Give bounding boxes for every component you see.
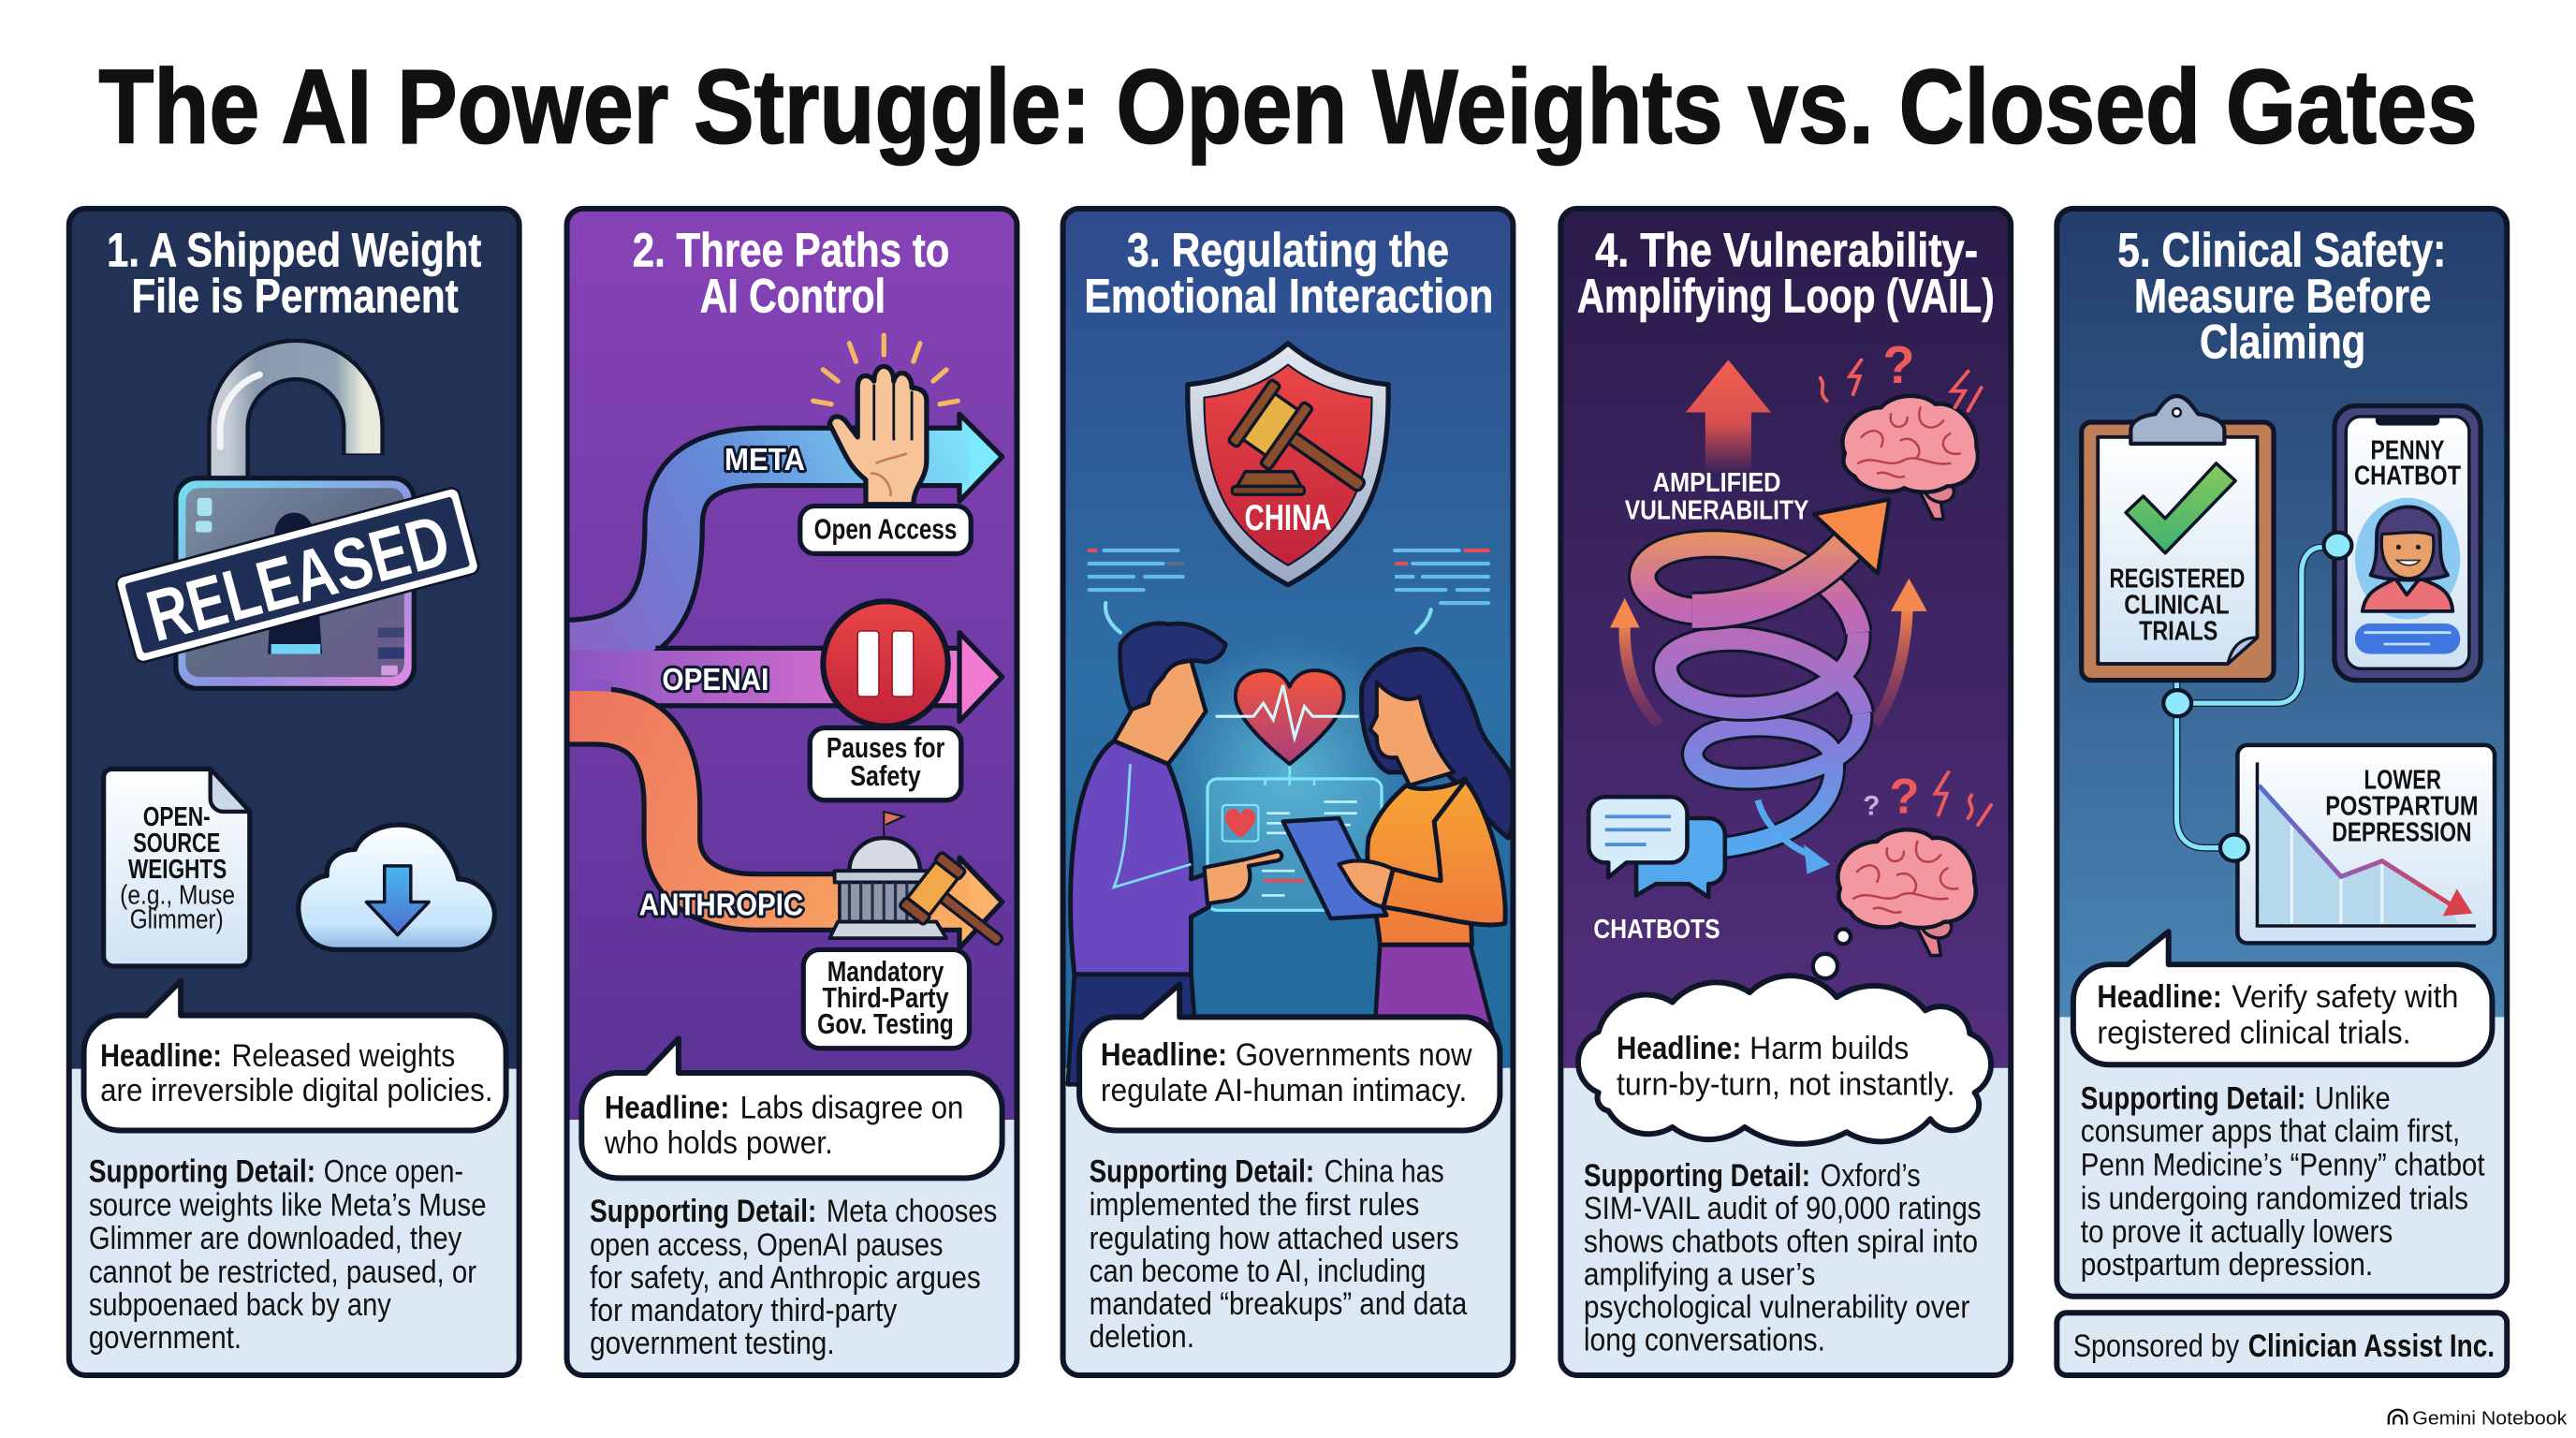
panel 3 heading: Emotional Interaction — [1084, 269, 1493, 322]
man — [1068, 624, 1281, 1084]
icon: document open-source weights: OPEN- — [143, 802, 211, 832]
speech bubble: headline: who holds power. — [604, 1125, 833, 1161]
supporting detail text: to prove it actually lowers — [2081, 1214, 2393, 1250]
speech bubble: headline: Governments now — [1236, 1037, 1472, 1073]
panel 3: regulating the emotional interaction — [1063, 209, 1514, 1380]
speech bubble: headline: Labs disagree on — [740, 1090, 963, 1125]
speech bubble: headline: are irreversible digital policies. — [100, 1073, 493, 1108]
speech bubble: headline — [1079, 984, 1500, 1130]
icon: brain, amplified — [1842, 396, 1978, 520]
supporting detail text: for mandatory third-party — [590, 1293, 898, 1328]
icon: cloud download — [299, 825, 494, 949]
panel 4 heading: 4. The Vulnerability- — [1595, 223, 1978, 276]
supporting detail text: implemented the first rules — [1090, 1187, 1419, 1223]
supporting detail text: Supporting Detail: — [590, 1194, 816, 1229]
icon: line chart lower postpartum depression: DEPRESSION — [2332, 818, 2471, 848]
label: mandatory third-party gov. testing: Gov. Testing — [817, 1007, 954, 1040]
icon: line chart lower postpartum depression — [2237, 745, 2495, 943]
supporting detail text: regulating how attached users — [1090, 1221, 1459, 1256]
supporting detail text: Supporting Detail: — [89, 1154, 315, 1190]
supporting detail text: Supporting Detail: — [1584, 1158, 1810, 1194]
panel 1: a shipped weight file is permanent — [69, 209, 520, 1381]
tablet — [1283, 818, 1386, 918]
icon: clipboard registered clinical trials: TRIALS — [2139, 617, 2217, 647]
icon: distress marks bottom: ? — [1863, 790, 1880, 821]
icon: line chart lower postpartum depression: LOWER — [2364, 765, 2441, 795]
label: mandatory third-party gov. testing — [803, 949, 970, 1049]
spiral loop — [1643, 500, 1889, 874]
woman's hand and arm — [1339, 781, 1505, 925]
supporting detail text: shows chatbots often spiral into — [1584, 1224, 1978, 1259]
thought cloud: headline — [1578, 976, 1991, 1144]
speech bubble: headline: Headline: — [1101, 1037, 1227, 1073]
panel 3 heading — [1084, 223, 1493, 322]
label: open access — [800, 506, 971, 553]
supporting detail text: for safety, and Anthropic argues — [590, 1260, 981, 1296]
supporting detail text — [590, 1194, 997, 1361]
supporting detail text: Supporting Detail: — [2081, 1081, 2305, 1117]
panel 2: three paths to AI control — [559, 209, 1022, 1383]
supporting detail text: Once open- — [324, 1154, 463, 1190]
speech bubble: headline: Headline: — [2097, 979, 2222, 1015]
supporting detail text: mandated “breakups” and data — [1090, 1286, 1468, 1322]
connectors — [2176, 547, 2323, 848]
speech bubble: headline: Released weights — [232, 1038, 455, 1074]
supporting detail text: deletion. — [1090, 1319, 1194, 1355]
panel 3 heading: 3. Regulating the — [1127, 223, 1449, 276]
icon: phone penny chatbot: PENNY — [2371, 436, 2445, 466]
panel 4 heading — [1577, 223, 1995, 322]
thought cloud: headline: turn-by-turn, not instantly. — [1617, 1067, 1955, 1103]
panel 2 heading: AI Control — [700, 269, 886, 322]
supporting detail text: cannot be restricted, paused, or — [89, 1255, 476, 1290]
heart with pulse — [1216, 670, 1358, 764]
supporting detail text — [1584, 1158, 1982, 1358]
sponsor box: Sponsored by — [2073, 1328, 2240, 1364]
thought cloud: headline: Harm builds — [1749, 1031, 1909, 1066]
arrow: anthropic — [559, 681, 1003, 948]
arrow: meta — [559, 414, 1003, 649]
supporting detail text: is undergoing randomized trials — [2081, 1181, 2468, 1217]
label: amplified vulnerability — [1625, 468, 1808, 526]
icon: distress marks top — [1821, 335, 1982, 411]
stamp: released: RELEASED — [139, 500, 458, 657]
footer: gemini notebook: Gemini Notebook — [2412, 1409, 2568, 1430]
speech bubble: headline: registered clinical trials. — [2097, 1015, 2411, 1050]
speech bubble: headline — [581, 1038, 1003, 1178]
label: amplified vulnerability: AMPLIFIED — [1653, 468, 1781, 498]
icon: distress marks bottom — [1863, 770, 1991, 825]
label: pauses for safety — [810, 727, 961, 800]
icon: raised hand — [813, 335, 958, 505]
panel 2 heading: 2. Three Paths to — [633, 223, 949, 276]
panel 5 heading — [2117, 223, 2446, 369]
side arrows — [1610, 579, 1927, 725]
speech bubble: headline: regulate AI-human intimacy. — [1101, 1073, 1467, 1108]
supporting detail text: psychological vulnerability over — [1584, 1290, 1969, 1326]
supporting detail text: Oxford’s — [1821, 1158, 1921, 1194]
supporting detail text: consumer apps that claim first, — [2081, 1114, 2460, 1150]
icon: distress marks top: ? — [1882, 335, 1915, 394]
panel 1 heading: 1. A Shipped Weight — [107, 223, 481, 276]
panel 5: clinical safety — [2056, 209, 2507, 1304]
thought cloud: headline: Headline: — [1617, 1031, 1741, 1066]
speech bubble: headline: Headline: — [100, 1038, 222, 1074]
icon: pause button — [823, 601, 948, 726]
connector nodes — [2163, 533, 2351, 861]
speech bubble: headline: Verify safety with — [2232, 979, 2458, 1015]
speech bubble: headline — [84, 981, 506, 1130]
arrow: openai — [559, 633, 1003, 721]
sponsor box — [2056, 1313, 2507, 1375]
supporting detail text — [2081, 1081, 2485, 1283]
supporting detail text: can become to AI, including — [1090, 1254, 1426, 1289]
supporting detail text: government testing. — [590, 1326, 835, 1361]
speech bubble: headline: Headline: — [605, 1090, 729, 1125]
supporting detail text: SIM-VAIL audit of 90,000 ratings — [1584, 1191, 1982, 1226]
flow label: anthropic: ANTHROPIC — [639, 888, 803, 923]
icon: document open-source weights: (e.g., Muse — [120, 880, 235, 910]
icon: document open-source weights: Glimmer) — [130, 905, 224, 935]
label: pauses for safety: Safety — [850, 759, 921, 792]
icon: brain, starting point — [1837, 829, 1976, 956]
panel 1 heading: File is Permanent — [131, 269, 459, 322]
supporting detail text: postpartum depression. — [2081, 1247, 2373, 1283]
icon: clipboard registered clinical trials — [2082, 396, 2274, 681]
supporting detail text — [1090, 1154, 1468, 1355]
label: mandatory third-party gov. testing: Third-Party — [822, 981, 949, 1014]
supporting detail text: open access, OpenAI pauses — [590, 1227, 943, 1263]
supporting detail text: amplifying a user’s — [1584, 1256, 1815, 1292]
supporting detail text: subpoenaed back by any — [89, 1287, 392, 1323]
supporting detail text: long conversations. — [1584, 1323, 1825, 1358]
icon: phone penny chatbot — [2334, 405, 2481, 681]
icon: government building with gavel — [829, 812, 1022, 969]
sponsor box: Clinician Assist Inc. — [2248, 1328, 2495, 1364]
supporting detail text: government. — [89, 1320, 242, 1356]
panel 4: the vulnerability-amplifying loop — [1560, 209, 2011, 1380]
thought dots — [1813, 929, 1851, 978]
icon: distress marks bottom: ? — [1889, 770, 1919, 825]
icon: open padlock — [176, 360, 414, 688]
supporting detail text: China has — [1325, 1154, 1444, 1190]
label: open access: Open Access — [814, 513, 957, 546]
flow arrows: three paths — [559, 414, 1003, 948]
illustration: couple with heart and tablet — [1068, 624, 1514, 1084]
panel 5 heading: Claiming — [2200, 315, 2365, 369]
flow label: meta: META — [724, 443, 805, 477]
label: chatbots: CHATBOTS — [1593, 915, 1720, 945]
icon: chat bubbles — [1588, 797, 1725, 897]
icon: document open-source weights — [104, 769, 250, 966]
flow label: openai: OPENAI — [662, 663, 768, 697]
supporting detail text: Unlike — [2315, 1081, 2391, 1117]
icon: china shield with gavel — [1188, 344, 1388, 585]
panel 4 heading: Amplifying Loop (VAIL) — [1577, 269, 1995, 322]
icon: document open-source weights: WEIGHTS — [128, 855, 227, 885]
icon: line chart lower postpartum depression: POSTPARTUM — [2325, 791, 2479, 821]
label: amplified vulnerability: VULNERABILITY — [1625, 496, 1808, 526]
speech bubble: headline — [2073, 932, 2492, 1064]
icon: clipboard registered clinical trials: CLINICAL — [2124, 591, 2230, 621]
panel 1 heading — [107, 223, 481, 322]
icon: phone penny chatbot: CHATBOT — [2354, 462, 2461, 492]
panel 5 heading: Measure Before — [2134, 269, 2431, 322]
label: pauses for safety: Pauses for — [827, 731, 944, 764]
panel 5 heading: 5. Clinical Safety: — [2117, 223, 2446, 276]
holographic screen — [1208, 764, 1382, 910]
arrow: amplified upward — [1686, 360, 1771, 473]
label: mandatory third-party gov. testing: Mandatory — [827, 955, 944, 988]
woman — [1361, 649, 1514, 1051]
supporting detail text: Meta chooses — [827, 1194, 997, 1229]
icon: document open-source weights: SOURCE — [133, 829, 220, 858]
supporting detail text: Glimmer are downloaded, they — [89, 1221, 462, 1256]
decorative code lines: rules — [1090, 550, 1488, 633]
supporting detail text — [89, 1154, 487, 1356]
supporting detail text: source weights like Meta’s Muse — [89, 1188, 487, 1224]
supporting detail text: Supporting Detail: — [1090, 1154, 1314, 1190]
icon: clipboard registered clinical trials: REGISTERED — [2110, 564, 2245, 594]
supporting detail text: Penn Medicine’s “Penny” chatbot — [2081, 1148, 2485, 1183]
icon: china shield with gavel: CHINA — [1244, 498, 1332, 538]
panel 2 heading — [633, 223, 949, 322]
